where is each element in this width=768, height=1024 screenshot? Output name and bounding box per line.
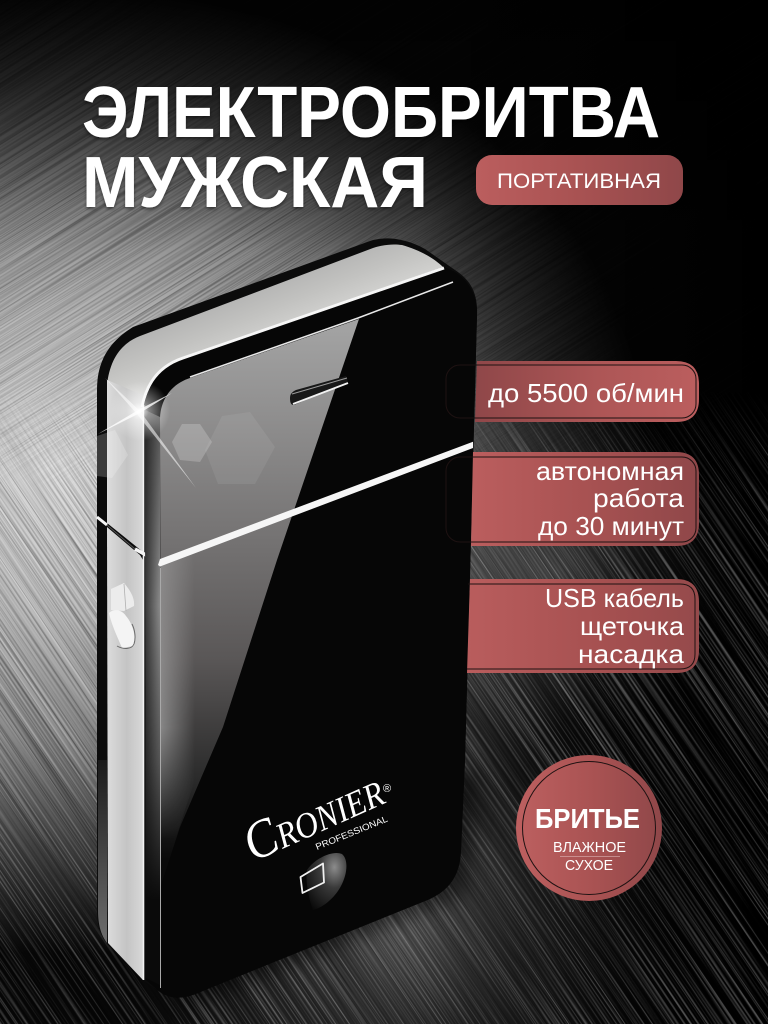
side buttons	[109, 583, 135, 648]
home button	[300, 853, 346, 910]
left reflective band	[145, 410, 160, 985]
left silver side lower	[107, 527, 143, 980]
speaker slot	[290, 376, 348, 405]
device body outer dark edge	[97, 238, 477, 998]
device shadow	[130, 770, 480, 1005]
card: accessories: щеточка	[580, 611, 685, 641]
front band white line	[158, 442, 473, 566]
card: speed: до 5500 об/мин	[488, 378, 684, 408]
logo: CRONIER PROFESSIONAL: CRONIER	[233, 758, 392, 873]
logo: CRONIER PROFESSIONAL: ®	[383, 783, 391, 795]
badge: shaving types: СУХОЕ	[565, 857, 613, 874]
black band and front face	[145, 267, 477, 998]
left silver side upper	[107, 380, 143, 552]
silver edge white line	[142, 405, 144, 980]
card: battery life: до 30 минут	[538, 511, 684, 541]
shaver device	[97, 238, 477, 998]
card: battery life	[446, 452, 699, 546]
logo: CRONIER PROFESSIONAL: PROFESSIONAL	[314, 814, 389, 852]
card: accessories	[467, 579, 699, 673]
card: accessories: USB кабель	[545, 583, 684, 613]
card: accessories: насадка	[578, 639, 685, 669]
top silver strip	[107, 244, 443, 420]
card: battery life: работа	[593, 483, 685, 513]
gloss left glow	[160, 558, 191, 829]
title: МУЖСКАЯ	[82, 143, 428, 223]
card: speed	[446, 361, 699, 422]
lower edge tint	[98, 760, 107, 943]
card: battery life: автономная	[536, 456, 684, 486]
gloss reflection	[160, 319, 359, 885]
badge: портативная: ПОРТАТИВНАЯ	[497, 170, 661, 193]
thin front line	[190, 282, 453, 377]
badge: портативная	[476, 155, 683, 205]
title: ЭЛЕКТРОБРИТВА	[82, 73, 660, 153]
title	[82, 73, 660, 223]
face edge line	[160, 568, 162, 988]
lens flare	[97, 378, 275, 488]
seam line on side	[97, 517, 158, 565]
top white highlight	[142, 268, 444, 407]
badge: shaving types	[516, 755, 662, 901]
badge: shaving types: БРИТЬЕ	[535, 803, 640, 834]
badge: shaving types: ВЛАЖНОЕ	[553, 839, 626, 856]
